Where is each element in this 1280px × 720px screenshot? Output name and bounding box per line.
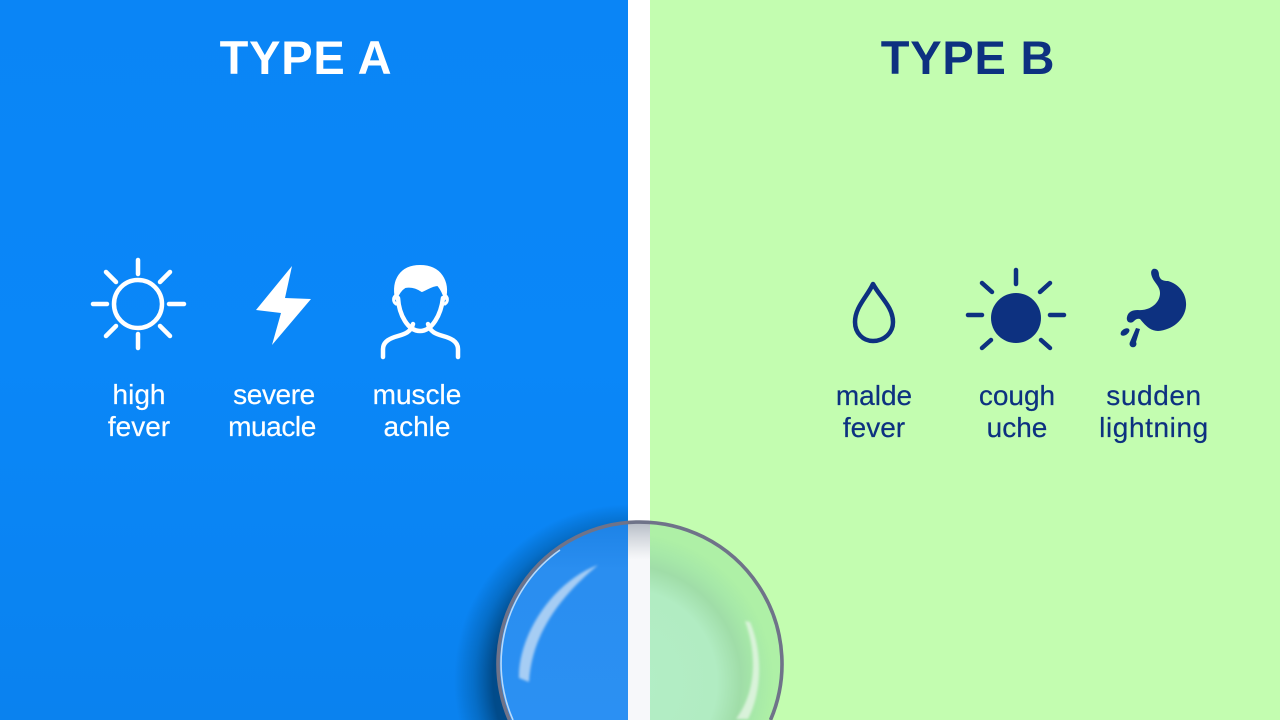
highlight left (519, 565, 598, 682)
lens glass right half (650, 520, 786, 720)
label: high fever: fever (108, 411, 170, 442)
highlight right (736, 621, 759, 719)
label: severe muacle: muacle (228, 411, 316, 442)
label: sudden lightning (1099, 380, 1209, 444)
label: cough uche: uche (987, 412, 1047, 443)
lens top shade on bar (628, 522, 650, 560)
panel: Type A background (0, 0, 628, 720)
label: sudden lightning: lightning (1099, 412, 1209, 443)
magnifying lens (458, 508, 784, 720)
label: cough uche: cough (979, 380, 1055, 411)
lens inner white rim (501, 550, 560, 720)
label: muscle achle: muscle (373, 379, 461, 410)
label: muscle achle (373, 379, 461, 442)
lens glass centre bar (628, 520, 650, 720)
label: high fever: high (113, 379, 165, 410)
lens rim (498, 522, 782, 720)
label: severe muacle (228, 379, 316, 442)
label: high fever (108, 379, 170, 442)
label: malde fever: malde (836, 380, 912, 411)
label: sudden lightning: sudden (1106, 380, 1202, 411)
label: muscle achle: achle (384, 411, 450, 442)
heading: Type A: TYPE A (220, 31, 392, 84)
panel: Type B background (650, 0, 1280, 720)
label: severe muacle: severe (233, 379, 315, 410)
divider: white centre bar (628, 0, 650, 720)
lens glass left half (496, 520, 628, 720)
label: malde fever: fever (843, 412, 905, 443)
heading: Type B: TYPE B (881, 31, 1055, 84)
lens drop shadow (450, 500, 628, 720)
label: malde fever (836, 380, 912, 443)
label: cough uche (979, 380, 1055, 443)
